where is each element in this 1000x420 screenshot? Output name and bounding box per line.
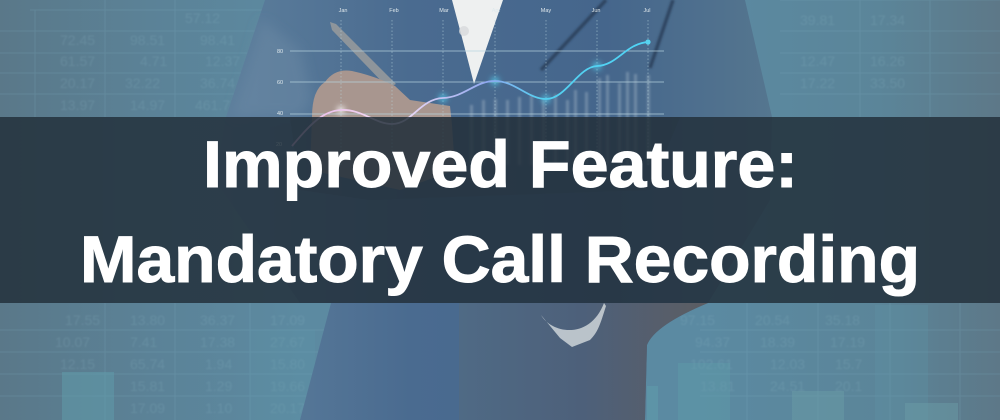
- background table numbers: 461.7: [195, 97, 230, 113]
- background table numbers: 35.18: [825, 312, 860, 328]
- lower jacket: [459, 303, 708, 420]
- background table numbers: 33.50: [870, 75, 905, 91]
- chart axis labels: Apr: [492, 8, 500, 14]
- background table numbers: 97.15: [680, 312, 715, 328]
- background table numbers: 102.61: [690, 356, 733, 372]
- background table numbers: 65.74: [130, 356, 165, 372]
- background table numbers: 94.37: [695, 334, 730, 350]
- chart grid: [290, 20, 664, 165]
- tablet: [290, 117, 680, 200]
- shirt button: [459, 26, 469, 36]
- background table numbers: 15.81: [130, 378, 165, 394]
- background table numbers: 12.03: [770, 356, 805, 372]
- chart line: [292, 42, 648, 146]
- background table numbers: 12.15: [60, 356, 95, 372]
- background table numbers: 20.17: [270, 400, 305, 416]
- background bars: [62, 305, 958, 420]
- background table numbers: 36.37: [200, 312, 235, 328]
- background table numbers: 20.17: [60, 75, 95, 91]
- background table numbers: 7.41: [130, 334, 157, 350]
- background table numbers: 20.54: [755, 312, 790, 328]
- title band: [0, 117, 1000, 303]
- hand: [310, 70, 455, 190]
- chart axis labels: 80: [277, 49, 283, 55]
- background table numbers: 4.71: [140, 53, 167, 69]
- background table numbers: 12.37: [205, 53, 240, 69]
- background table numbers: 17.55: [65, 312, 100, 328]
- background table numbers: 39.81: [800, 12, 835, 28]
- chart axis labels: 20: [276, 142, 282, 148]
- background table numbers: 15.7: [835, 356, 862, 372]
- lapel dark lines: [541, 0, 673, 70]
- chart bars: [470, 72, 650, 165]
- background table numbers: 17.09: [270, 312, 305, 328]
- background table numbers: 13.81: [700, 378, 735, 394]
- background table numbers: 10.07: [55, 334, 90, 350]
- background table numbers: 98.41: [200, 32, 235, 48]
- background table numbers: 13.80: [130, 312, 165, 328]
- chart axis labels: Mar: [439, 8, 449, 14]
- background table numbers: 20.1: [835, 378, 862, 394]
- background table numbers: 12.47: [800, 53, 835, 69]
- background table numbers: 72.45: [60, 32, 95, 48]
- background table numbers: 19.66: [270, 378, 305, 394]
- chart axis labels: [276, 8, 651, 148]
- background table numbers: 15.80: [270, 356, 305, 372]
- shirt cuff: [541, 303, 606, 347]
- chart axis labels: 40: [277, 111, 283, 117]
- background table numbers: 14.97: [130, 97, 165, 113]
- shoulder highlight: [232, 20, 312, 117]
- chart axis labels: 60: [277, 80, 283, 86]
- background table numbers: 1.94: [205, 356, 232, 372]
- chart line glows: [337, 62, 601, 114]
- background table numbers: 16.26: [870, 53, 905, 69]
- chart axis labels: Jul: [643, 8, 651, 14]
- background table numbers: 24.51: [770, 378, 805, 394]
- background table numbers: 18.39: [760, 334, 795, 350]
- background table numbers: 17.38: [200, 334, 235, 350]
- background table numbers: 17.09: [130, 400, 165, 416]
- background table numbers: 98.51: [130, 32, 165, 48]
- shirt: [452, 0, 503, 84]
- background table numbers: 1.10: [205, 400, 232, 416]
- chart axis labels: Jan: [339, 8, 347, 14]
- background table numbers: 27.67: [270, 334, 305, 350]
- background table numbers: 17.22: [800, 75, 835, 91]
- chart end point: [645, 39, 651, 45]
- background table numbers: 57.12: [185, 10, 220, 26]
- chart axis labels: Feb: [389, 8, 399, 14]
- background table numbers: 13.97: [60, 97, 95, 113]
- background table numbers: 32.22: [125, 75, 160, 91]
- title line 1: Improved Feature:: [203, 127, 798, 201]
- background table numbers: 61.57: [60, 53, 95, 69]
- chart axis labels: Jun: [592, 8, 600, 14]
- title: [80, 127, 920, 296]
- title line 2: Mandatory Call Recording: [80, 222, 920, 296]
- background table numbers: 36.74: [200, 75, 235, 91]
- pen: [330, 22, 396, 88]
- chart axis labels: May: [541, 8, 551, 14]
- businessman suit: [215, 0, 772, 420]
- background table numbers: 17.34: [870, 12, 905, 28]
- background table numbers: 1.29: [205, 378, 232, 394]
- background table numbers: 17.19: [830, 334, 865, 350]
